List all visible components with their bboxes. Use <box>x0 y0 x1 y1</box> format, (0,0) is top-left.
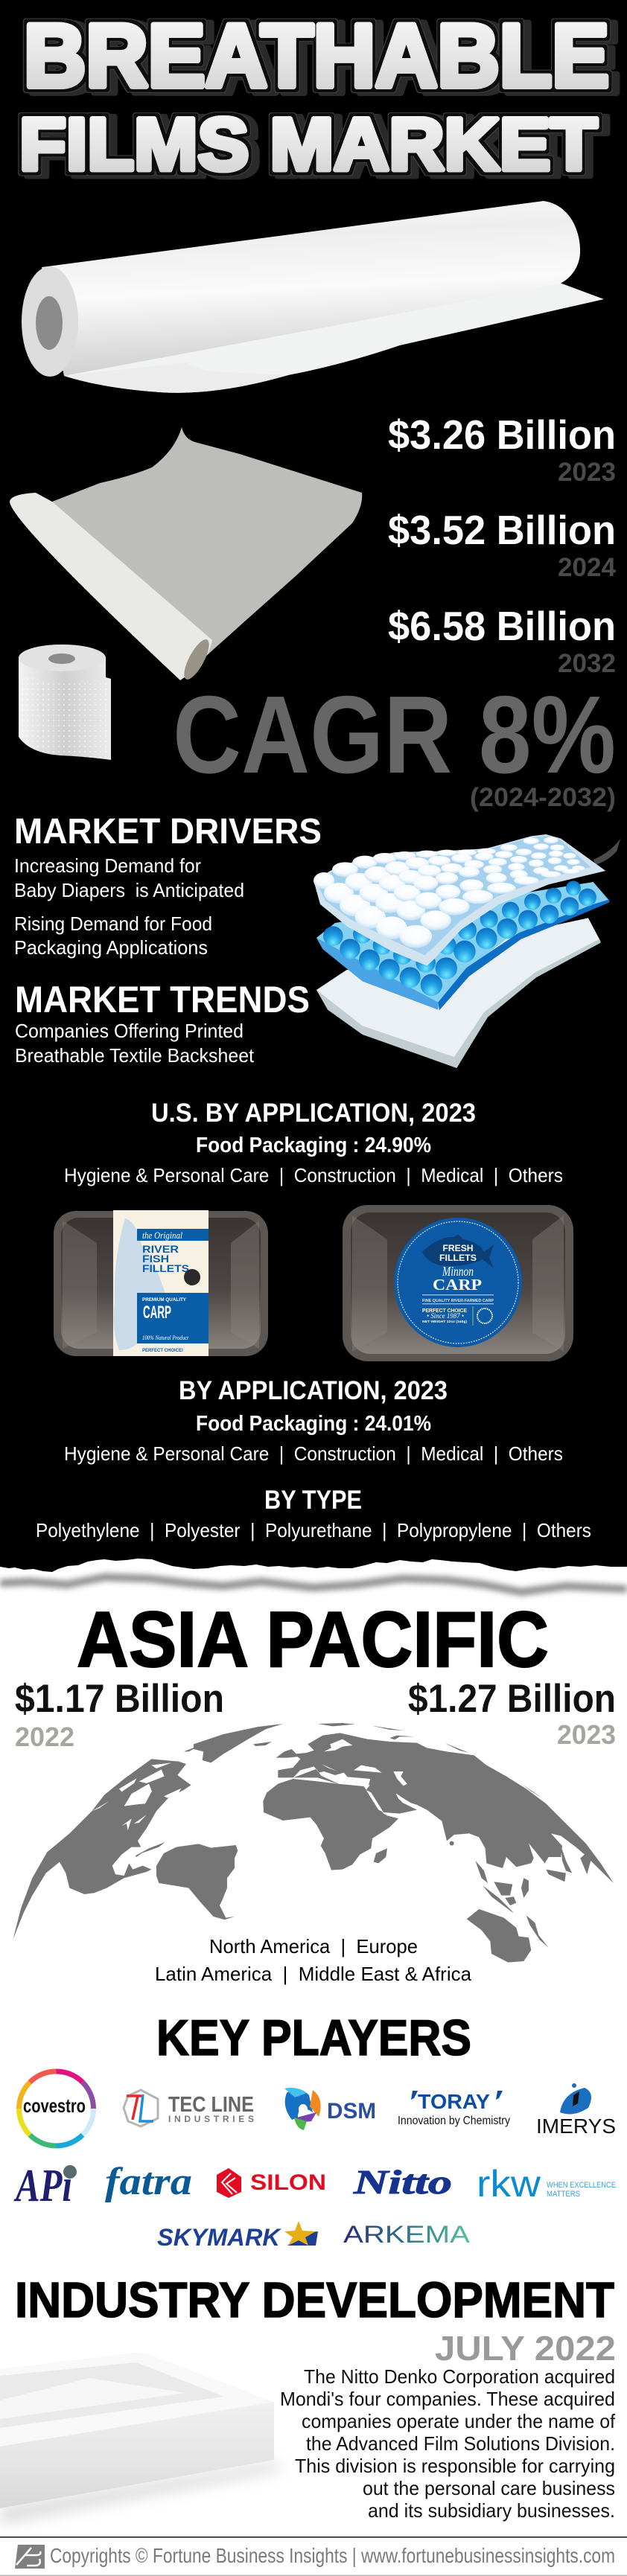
Asia Pacific 2022 value: $1.17 Billion <box>15 1677 224 1721</box>
U.S. by application: Food Packaging : 24.90% <box>196 1134 431 1157</box>
label band: PREMIUM QUALITY <box>142 1298 186 1303</box>
development text: Mondi's four companies. These acquired <box>280 2388 615 2410</box>
logo: RKW: MATTERS <box>547 2190 580 2199</box>
market size figures <box>388 412 617 678</box>
development text: companies operate under the name of <box>302 2410 616 2432</box>
development text: the Advanced Film Solutions Division. <box>306 2432 615 2455</box>
title: BREATHABLE <box>24 6 609 106</box>
map: Africa, Eurasia and Oceania <box>263 1723 614 1963</box>
U.S. by application: U.S. BY APPLICATION, 2023 <box>151 1099 476 1128</box>
world map <box>13 1723 614 1963</box>
oval label: FILLETS <box>439 1253 477 1263</box>
label band: 100% Natural Product <box>142 1335 189 1341</box>
other regions list: North America | Europe <box>209 1935 418 1957</box>
image: left food tray with band label <box>54 1210 268 1356</box>
image: right food tray with oval label <box>343 1205 573 1361</box>
logo: Toray <box>398 2090 510 2127</box>
market drivers: Increasing Demand for <box>14 854 201 877</box>
value 2024 <box>388 507 617 582</box>
market trends <box>15 979 310 1067</box>
other regions list: Latin America | Middle East & Africa <box>155 1963 472 1985</box>
value 2023: 2023 <box>558 458 616 487</box>
value 2024: 2024 <box>558 553 617 582</box>
Asia Pacific 2022 value <box>15 1677 224 1752</box>
Asia Pacific 2022 value: 2022 <box>15 1722 74 1752</box>
label band: FISH <box>142 1253 169 1265</box>
value 2032: 2032 <box>558 649 616 678</box>
logo: Tec Line Industries: TEC LINE <box>168 2093 254 2117</box>
development text <box>280 2365 616 2522</box>
market drivers: MARKET DRIVERS <box>14 812 322 851</box>
image: large film roll <box>22 201 604 393</box>
market drivers: Rising Demand for Food <box>14 913 212 935</box>
icon: Fortune Business Insights logo <box>15 2545 45 2569</box>
by application: Hygiene & Personal Care | Construction | Medical | Others <box>64 1442 563 1465</box>
oval label: FINE QUALITY RIVER-FARMED CARP <box>422 1299 494 1303</box>
oval label <box>394 1218 522 1347</box>
value 2024: $3.52 Billion <box>388 507 616 553</box>
logo: Silon: SILON <box>250 2170 326 2195</box>
U.S. by application: Hygiene & Personal Care | Construction | Medical | Others <box>64 1164 563 1186</box>
logo: Covestro <box>19 2071 94 2146</box>
development text: out the personal care business <box>363 2477 615 2499</box>
value 2023 <box>388 412 616 487</box>
oval label: PERFECT CHOICE <box>422 1308 467 1314</box>
market trends: Breathable Textile Backsheet <box>15 1044 255 1067</box>
image: white box with window <box>0 2352 283 2523</box>
logo: DSM <box>284 2088 376 2130</box>
label band: RIVER <box>142 1243 179 1255</box>
value 2023: $3.26 Billion <box>388 412 616 458</box>
market drivers <box>14 812 322 959</box>
logo: Skymark: SKYMARK <box>157 2224 282 2251</box>
label band <box>113 1210 209 1356</box>
value 2032: $6.58 Billion <box>388 603 616 649</box>
heading: key players: KEY PLAYERS <box>156 2010 471 2066</box>
by type <box>36 1486 591 1541</box>
development text: and its subsidiary businesses. <box>368 2499 615 2522</box>
label band: CARP <box>143 1303 171 1323</box>
logo: Imerys <box>536 2083 616 2138</box>
by application: Food Packaging : 24.01% <box>196 1412 431 1436</box>
logo: Fatra: fatra <box>105 2161 192 2203</box>
market drivers: Baby Diapers is Anticipated <box>14 879 244 901</box>
image: unrolled film sheet <box>10 427 362 683</box>
Asia Pacific 2023 value <box>408 1677 616 1750</box>
torn paper divider and black upper background <box>0 0 627 1611</box>
Asia Pacific 2023 value: 2023 <box>557 1719 616 1750</box>
U.S. by application <box>64 1099 563 1186</box>
by application: BY APPLICATION, 2023 <box>179 1376 448 1405</box>
by application <box>64 1376 563 1465</box>
market trends: Companies Offering Printed <box>15 1020 244 1042</box>
label band: FILLETS <box>142 1262 189 1274</box>
development text: The Nitto Denko Corporation acquired <box>304 2365 615 2388</box>
logo: RKW <box>477 2163 616 2205</box>
logo: RKW: WHEN EXCELLENCE <box>547 2181 616 2190</box>
label band: the Original <box>142 1230 182 1241</box>
logo: Nitto: Nitto <box>353 2163 452 2201</box>
logo: Arkema: ARKEMA <box>343 2221 471 2248</box>
market drivers: Packaging Applications <box>14 936 208 959</box>
title: FILMS MARKET <box>19 103 597 185</box>
logo: Toray: TORAY <box>418 2090 490 2113</box>
logo: RKW: rkw <box>477 2163 541 2205</box>
map: Americas and Greenland <box>13 1724 299 1940</box>
oval label: FRESH <box>442 1243 474 1253</box>
title <box>19 6 609 185</box>
logo: DSM: DSM <box>327 2099 376 2123</box>
logo: Covestro: covestro <box>23 2094 86 2117</box>
logo: Skymark <box>157 2221 318 2251</box>
value 2032 <box>388 603 616 678</box>
heading: Asia Pacific: ASIA PACIFIC <box>77 1596 549 1684</box>
development text: This division is responsible for carrying <box>295 2455 615 2477</box>
oval label: • Since 1987 • <box>427 1312 464 1320</box>
logo: Tec Line Industries <box>124 2090 254 2126</box>
logo: API: APi <box>13 2161 72 2211</box>
oval label: CARP <box>433 1276 482 1294</box>
oval label: Minnon <box>442 1264 474 1279</box>
market trends: MARKET TRENDS <box>15 979 310 1020</box>
CAGR callout: (2024-2032) <box>470 783 616 812</box>
logo: Tec Line Industries: INDUSTRIES <box>168 2114 254 2124</box>
development date: JULY 2022 <box>435 2329 616 2368</box>
by type: BY TYPE <box>264 1486 362 1515</box>
oval label: NET WEIGHT 12oz (340g) <box>422 1320 468 1323</box>
image: small perforated roll <box>19 645 111 760</box>
logo: Toray: Innovation by Chemistry <box>398 2115 510 2127</box>
logo: Silon <box>217 2168 326 2198</box>
logo: Imerys: IMERYS <box>536 2115 616 2138</box>
other regions list <box>155 1935 472 1985</box>
label band: PERFECT CHOICE! <box>142 1349 183 1353</box>
image: diaper material layers <box>314 834 620 1068</box>
by type: Polyethylene | Polyester | Polyurethane | Polypropylene | Others <box>36 1519 591 1541</box>
